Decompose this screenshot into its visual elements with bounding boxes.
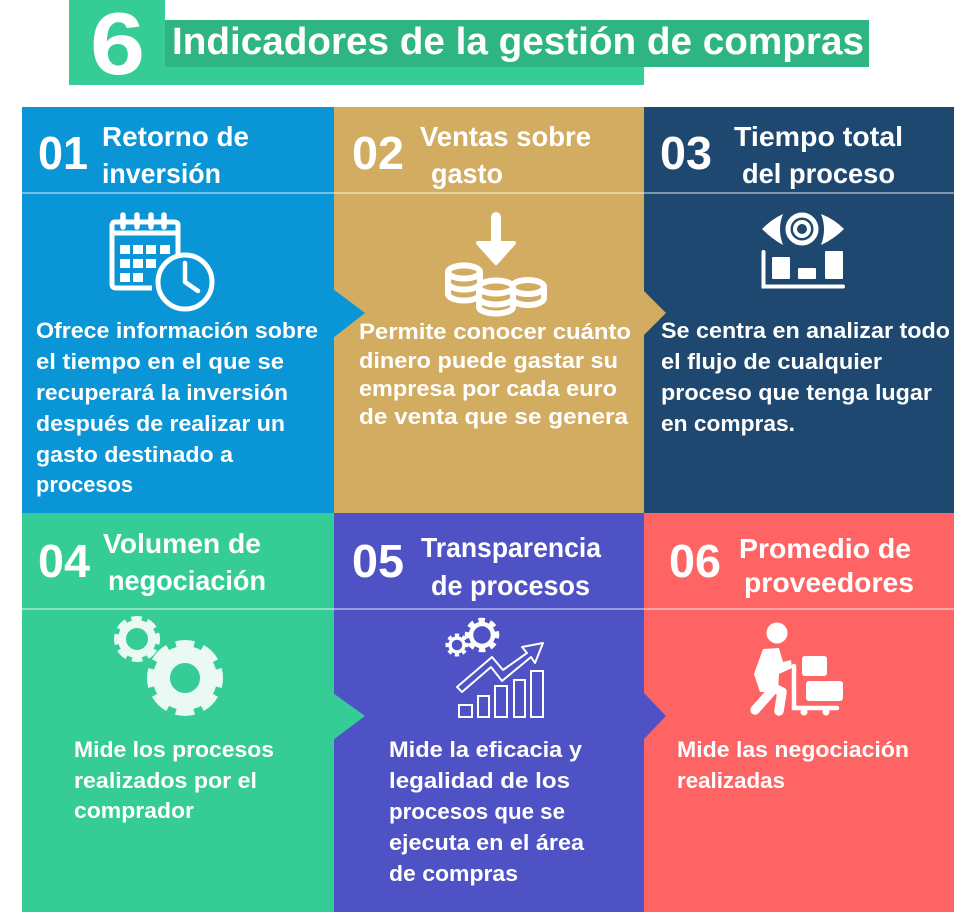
panel: 04 volumen de negociacion: Volumen de <box>103 528 261 559</box>
text block: 04 description <box>74 737 274 823</box>
text block: 04 description: Mide los procesos <box>74 737 274 762</box>
panel: 06 promedio de proveedores <box>644 513 954 912</box>
panel: 02 ventas sobre gasto: 02 <box>352 127 404 179</box>
text block: 01 description: recuperará la inversión <box>36 380 288 405</box>
panel: 03 tiempo total del proceso: Tiempo total <box>734 121 903 152</box>
text block: 02 description: empresa por cada euro <box>359 376 617 401</box>
panel: 02 ventas sobre gasto: gasto <box>431 158 503 189</box>
text block: 04 description: realizados por el <box>74 768 257 793</box>
text block: 02 description: de venta que se genera <box>359 404 629 429</box>
icon: gears and rising chart <box>447 620 543 717</box>
text block: 06 description: Mide las negociación <box>677 737 909 762</box>
text block: 01 description: después de realizar un <box>36 411 285 436</box>
panel: 05 transparencia de procesos: Transparencia <box>421 532 601 563</box>
panel: 03 tiempo total del proceso <box>644 107 954 513</box>
panel: 02 ventas sobre gasto: Ventas sobre <box>420 121 591 152</box>
arrow: 05 to 06 <box>643 692 666 740</box>
arrow: 02 to 03 <box>643 290 666 336</box>
text block: 05 description: procesos que se <box>389 799 565 824</box>
icon: coins with down arrow <box>448 217 544 314</box>
panel: 05 transparencia de procesos: de procesos <box>431 570 590 601</box>
icon: eye over bar chart <box>762 214 844 286</box>
text block: 02 description: Permite conocer cuánto <box>359 319 631 344</box>
text block: 01 description: gasto destinado a <box>36 442 234 467</box>
icon: calendar and clock <box>112 215 212 309</box>
panel: 03 tiempo total del proceso: del proceso <box>742 158 895 189</box>
panel: 01 retorno de inversion: Retorno de <box>102 121 249 152</box>
text block: 05 description: ejecuta en el área <box>389 830 585 855</box>
panel: 04 volumen de negociacion <box>22 513 334 912</box>
text block: 03 description: proceso que tenga lugar <box>661 380 932 405</box>
arrow: 01 to 02 <box>333 289 365 338</box>
panel: 01 retorno de inversion: 01 <box>38 127 88 179</box>
panel: 05 transparencia de procesos: 05 <box>352 535 404 587</box>
text block: 01 description <box>36 318 318 497</box>
text block: 05 description: legalidad de los <box>389 768 570 793</box>
text block: 01 description: el tiempo en el que se <box>36 349 284 374</box>
title banner: Indicadores de la gestión de compras <box>172 21 864 63</box>
text block: 05 description <box>389 737 585 886</box>
text block: 03 description: en compras. <box>661 411 795 436</box>
text block: 03 description: Se centra en analizar todo <box>661 318 950 343</box>
text block: 04 description: comprador <box>74 798 194 823</box>
icon: two gears <box>116 618 219 712</box>
arrow: 04 to 05 <box>333 693 365 740</box>
panel: 05 transparencia de procesos <box>334 513 644 912</box>
text block: 06 description <box>677 737 909 793</box>
text block: 01 description: procesos <box>36 472 133 497</box>
text block: 05 description: de compras <box>389 861 518 886</box>
text block: 01 description: Ofrece información sobre <box>36 318 318 343</box>
panel: 01 retorno de inversion: inversión <box>102 158 221 189</box>
panel: 06 promedio de proveedores: Promedio de <box>739 533 911 564</box>
text block: 05 description: Mide la eficacia y <box>389 737 583 762</box>
panel: 04 volumen de negociacion: negociación <box>108 565 266 596</box>
panel: 03 tiempo total del proceso: 03 <box>660 127 712 179</box>
text block: 06 description: realizadas <box>677 768 785 793</box>
panel: 01 retorno de inversion <box>22 107 334 513</box>
text block: 02 description: dinero puede gastar su <box>359 348 618 373</box>
text block: 03 description <box>661 318 950 436</box>
icon: worker pushing cart <box>754 622 843 716</box>
panel: 04 volumen de negociacion: 04 <box>38 535 90 587</box>
panel: 02 ventas sobre gasto <box>334 107 644 513</box>
text block: 02 description <box>359 319 631 429</box>
title banner <box>69 0 869 93</box>
panel: 06 promedio de proveedores: 06 <box>669 535 721 587</box>
text block: 03 description: el flujo de cualquier <box>661 349 882 374</box>
panel: 06 promedio de proveedores: proveedores <box>744 567 914 598</box>
